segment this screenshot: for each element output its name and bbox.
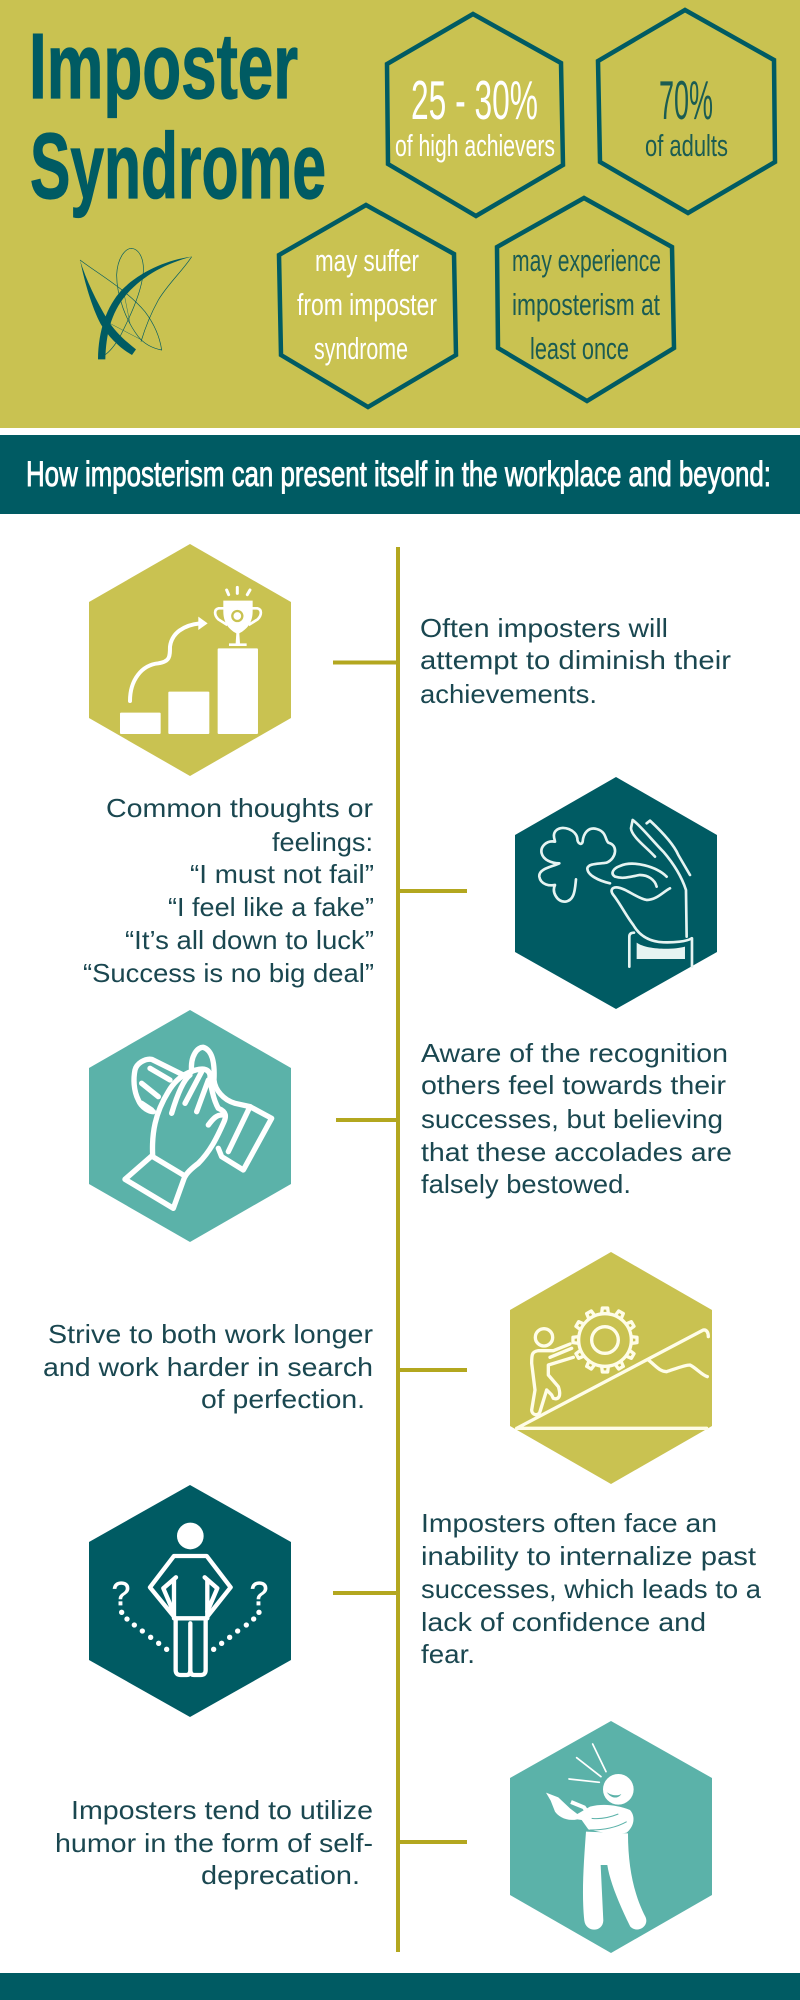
stat hexagon: may suffer from imposter syndrome: from imposter <box>297 287 437 322</box>
text: common thoughts or feelings: “Success is no big deal” <box>83 958 374 988</box>
stat hexagon: 25-30% of high achievers <box>387 14 563 216</box>
text: diminish achievements: achievements. <box>420 679 597 709</box>
text: humor self-deprecation: deprecation. <box>201 1860 360 1890</box>
panel: header <box>0 0 800 428</box>
stat hexagon: may suffer from imposter syndrome <box>279 205 456 407</box>
text: diminish achievements <box>420 613 731 709</box>
stat hexagon: may suffer from imposter syndrome: may suffer <box>315 243 419 278</box>
text: humor self-deprecation <box>55 1795 373 1890</box>
timeline: central line with branches <box>333 547 467 1952</box>
text: internalize past successes: lack of confidence and <box>421 1607 706 1637</box>
stat hexagon: may experience imposterism at least once <box>497 198 674 401</box>
hexagon icon: person pushing gear uphill <box>510 1252 712 1484</box>
text: humor self-deprecation: humor in the form of self- <box>55 1828 373 1858</box>
text: diminish achievements: Often imposters will <box>420 613 668 643</box>
text: internalize past successes: Imposters often face an <box>421 1508 717 1538</box>
text: aware of recognition: successes, but believing <box>421 1104 723 1134</box>
text: common thoughts or feelings: Common thoughts or <box>106 793 373 823</box>
text: internalize past successes: successes, which leads to a <box>421 1574 762 1604</box>
hexagon icon: confused person: ? <box>250 1576 268 1613</box>
stat hexagon: may suffer from imposter syndrome: syndrome <box>314 331 408 366</box>
text: strive to work harder: of perfection. <box>201 1384 365 1414</box>
text: aware of recognition: others feel towards their <box>421 1070 726 1100</box>
text: common thoughts or feelings: feelings: <box>272 827 373 857</box>
text: common thoughts or feelings <box>83 793 374 988</box>
title: Syndrome <box>30 114 326 218</box>
text: humor self-deprecation: Imposters tend to utilize <box>71 1795 373 1825</box>
stat hexagon: 70% of adults <box>598 10 775 213</box>
banner heading <box>0 435 800 514</box>
hexagon icon: hand plucking clover <box>515 777 717 1009</box>
text: internalize past successes: inability to internalize past <box>421 1541 757 1571</box>
hexagon icon: confused person <box>89 1485 291 1717</box>
text: aware of recognition: Aware of the recognition <box>421 1038 728 1068</box>
stat hexagon: 70% of adults: 70% <box>659 69 713 131</box>
hexagon icon: clapping hands <box>89 1010 291 1242</box>
text: aware of recognition: that these accolades are <box>421 1137 732 1167</box>
text: aware of recognition <box>421 1038 732 1199</box>
text: strive to work harder: Strive to both work longer <box>48 1319 373 1349</box>
stat hexagon: may experience imposterism at least once: least once <box>530 331 629 366</box>
stat hexagon: may experience imposterism at least once: imposterism at <box>512 287 660 322</box>
footer bar <box>0 1973 800 2000</box>
title: Imposter <box>29 14 298 118</box>
stat hexagon: 70% of adults: of adults <box>645 128 728 163</box>
text: strive to work harder <box>43 1319 373 1414</box>
hexagon icon: person pointing at self <box>510 1721 712 1953</box>
text: common thoughts or feelings: “I feel like a fake” <box>168 892 374 922</box>
stat hexagon: 25-30% of high achievers: 25 - 30% <box>411 69 538 131</box>
text: internalize past successes: fear. <box>421 1639 475 1669</box>
logo: abstract swirl <box>80 248 192 359</box>
text: common thoughts or feelings: “It’s all down to luck” <box>125 925 374 955</box>
stat hexagon: may experience imposterism at least once: may experience <box>512 243 661 278</box>
stat hexagon: 25-30% of high achievers: of high achievers <box>395 128 555 163</box>
text: internalize past successes <box>421 1508 762 1669</box>
text: common thoughts or feelings: “I must not fail” <box>190 859 374 889</box>
hexagon icon: confused person: ? <box>112 1576 130 1613</box>
text: diminish achievements: attempt to diminish their <box>420 645 731 675</box>
hexagon icon: steps to trophy <box>89 544 291 776</box>
text: aware of recognition: falsely bestowed. <box>421 1169 631 1199</box>
text: strive to work harder: and work harder in search <box>43 1352 373 1382</box>
title <box>29 14 326 218</box>
